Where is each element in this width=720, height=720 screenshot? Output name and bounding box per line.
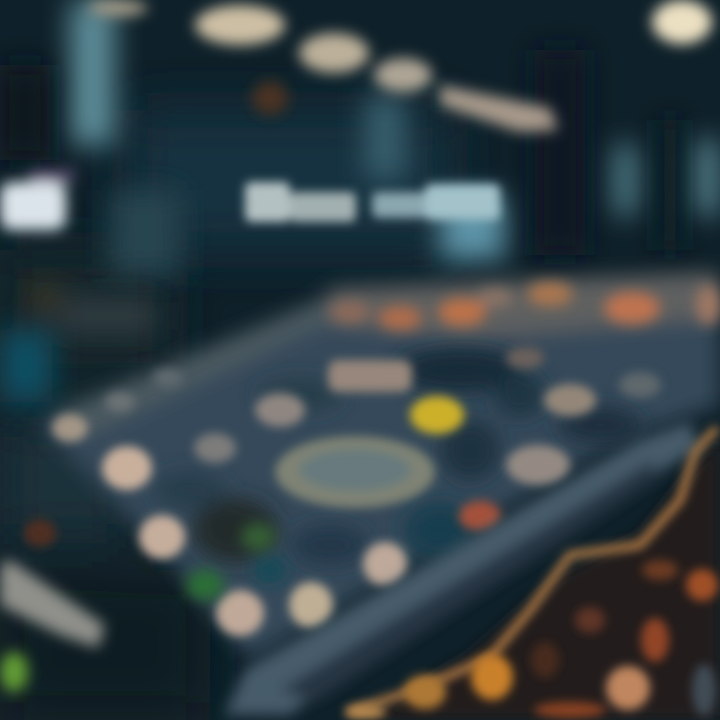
vertical light columns bbox=[70, 0, 720, 275]
table darker blotches bbox=[155, 348, 642, 565]
green tokens bbox=[0, 523, 287, 692]
heading glow: left screen bbox=[0, 170, 74, 230]
orange terrain spots bbox=[346, 560, 718, 719]
table front edge bbox=[225, 422, 700, 715]
metal bar bottom left bbox=[0, 560, 105, 648]
central dial bbox=[275, 436, 435, 508]
orange markers along back edge bbox=[330, 282, 720, 330]
lower right dark terrain bbox=[370, 440, 720, 720]
heading glow: center text bbox=[245, 182, 500, 222]
teal side panel bbox=[0, 287, 155, 402]
ceiling lights bbox=[88, 0, 712, 132]
orange line chart bbox=[350, 430, 715, 712]
table tokens bbox=[24, 347, 661, 636]
dark columns bbox=[0, 50, 680, 255]
upper wall shading bbox=[0, 110, 450, 720]
yellow token bbox=[410, 396, 464, 434]
table surface bbox=[40, 272, 720, 660]
